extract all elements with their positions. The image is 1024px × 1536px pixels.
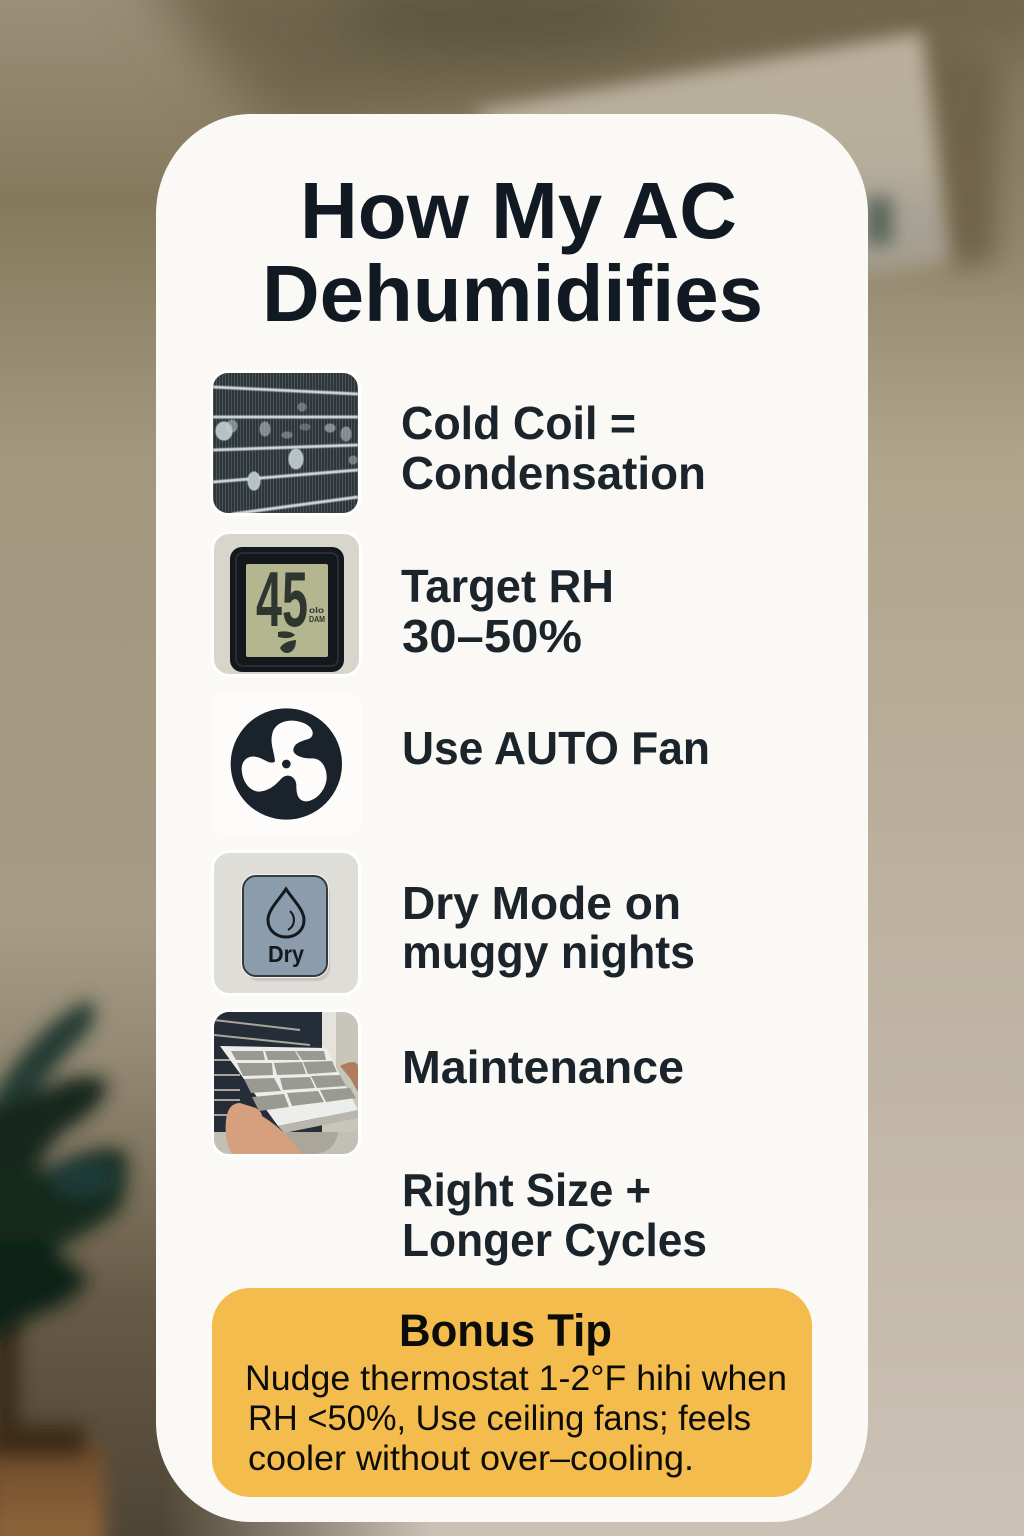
label: dry mode [402, 877, 695, 978]
blurred potted plant [0, 1000, 127, 1536]
image: hygrometer [211, 531, 362, 677]
ceiling shadow [130, 0, 1024, 130]
item: cold coil [210, 370, 706, 516]
callout body: cooler without over–cooling. [248, 1439, 694, 1478]
label: cold coil [401, 397, 706, 499]
label: auto fan: Use AUTO Fan [402, 722, 710, 774]
label: cold coil: Condensation [401, 447, 706, 499]
title: Dehumidifies [262, 249, 763, 338]
label: target RH: 30–50% [402, 610, 582, 662]
image: dry button: Dry [268, 941, 304, 967]
image: dry button [211, 850, 361, 996]
image: hygrometer: 45 [256, 555, 308, 643]
item: right size: Longer Cycles [402, 1214, 707, 1266]
item: auto fan [212, 693, 710, 835]
image: air filter being replaced [211, 1009, 361, 1157]
item: right size: Right Size + [402, 1164, 651, 1216]
label: cold coil: Cold Coil = [401, 397, 636, 449]
callout body: RH <50%, Use ceiling fans; feels [248, 1399, 751, 1438]
callout heading: Bonus Tip [399, 1305, 612, 1356]
image: hygrometer: olo [309, 606, 324, 615]
callout body [245, 1359, 787, 1478]
label: dry mode: muggy nights [402, 926, 695, 978]
icon: fan [212, 693, 362, 835]
title [262, 166, 763, 338]
image: hygrometer: DAM [309, 615, 325, 624]
label: dry mode: Dry Mode on [402, 877, 681, 929]
image: wet coil [210, 370, 361, 516]
item: maintenance [211, 1009, 684, 1157]
title: How My AC [300, 166, 737, 255]
callout: bonus tip [212, 1288, 812, 1497]
label: target RH [401, 560, 614, 662]
main card [156, 114, 868, 1522]
item: target RH [211, 531, 614, 677]
callout body: Nudge thermostat 1-2°F hihi when [245, 1359, 787, 1398]
blurred air conditioner [470, 32, 1000, 275]
item: dry mode [211, 850, 695, 996]
label: maintenance: Maintenance [402, 1041, 684, 1093]
item: right size [402, 1164, 707, 1266]
label: target RH: Target RH [401, 560, 614, 612]
